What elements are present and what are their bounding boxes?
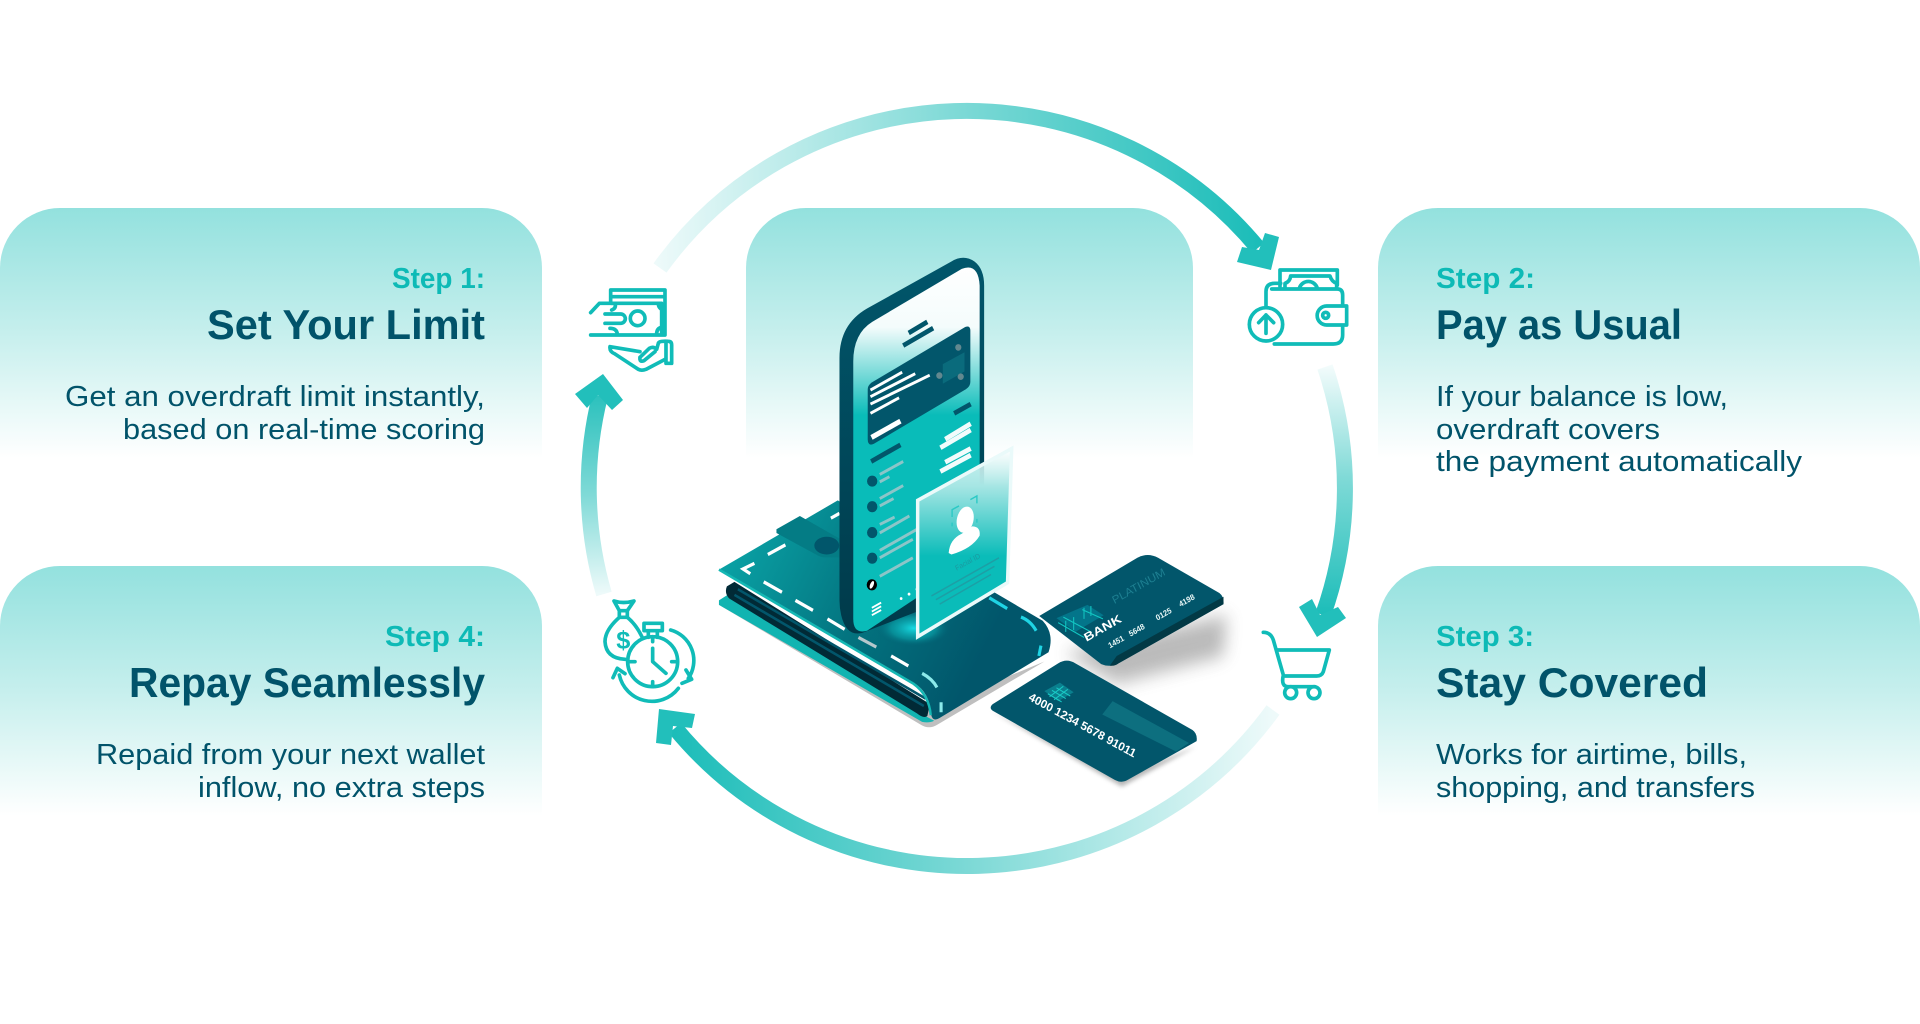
step 4 description: Repaid from your next wallet (96, 739, 485, 771)
illustration: phone, wallet and cards (719, 258, 1227, 787)
step 2 description: overdraft covers (1436, 414, 1660, 446)
arrow: step 4 to step 1 (575, 374, 623, 594)
step 2 label: Step 2: (1436, 263, 1535, 295)
step 1 description: Get an overdraft limit instantly, (65, 381, 485, 413)
arrow: step 1 to step 2 (660, 111, 1279, 270)
step 4 heading: Repay Seamlessly (129, 659, 486, 706)
icon: money bag and stopwatch (605, 601, 694, 701)
icon: shopping cart (1263, 632, 1329, 699)
panel: step 2 (1378, 208, 1920, 458)
credit card: numbered (991, 661, 1197, 787)
credit card: platinum: 4198 (1177, 592, 1197, 609)
panel: step 1 (0, 208, 542, 458)
arrow: step 2 to step 3 (1299, 367, 1346, 637)
step 2 description (1436, 381, 1803, 478)
step 1 description: based on real-time scoring (123, 414, 485, 446)
step 3 description: Works for airtime, bills, (1436, 739, 1747, 771)
panel: center backdrop (746, 208, 1193, 458)
step 2 description: the payment automatically (1436, 446, 1803, 478)
phone (839, 258, 984, 634)
glass ID card: Facial ID (954, 552, 982, 573)
panel: step 4 (0, 566, 542, 816)
glass ID card (918, 449, 1012, 637)
person icon (949, 504, 980, 554)
step 3 label: Step 3: (1436, 621, 1534, 653)
step 4 description (96, 739, 485, 804)
wallet (719, 500, 1051, 727)
credit card: platinum: 0125 (1154, 606, 1174, 623)
phone balance card (868, 326, 970, 445)
step 4 description: inflow, no extra steps (198, 772, 485, 804)
step 2 heading: Pay as Usual (1436, 301, 1682, 348)
panel: step 3 (1378, 566, 1920, 816)
step 3 heading: Stay Covered (1436, 659, 1708, 706)
credit card: platinum: 5648 (1127, 621, 1147, 639)
step 3 description (1436, 739, 1755, 804)
wallet clasp (776, 516, 841, 557)
step 4 label: Step 4: (385, 621, 485, 653)
icon: cash and hand (591, 290, 672, 370)
icon: money bag and stopwatch: $ (616, 626, 630, 654)
step 1 description (65, 381, 485, 446)
step 1 heading: Set Your Limit (207, 301, 485, 348)
icon: wallet with upload (1249, 270, 1347, 344)
credit card: platinum: 1451 (1107, 633, 1126, 650)
credit card: platinum: BANK (1082, 613, 1124, 645)
step 1 label: Step 1: (392, 263, 485, 295)
arrow: step 3 to step 4 (656, 709, 1273, 866)
step 3 description: shopping, and transfers (1436, 772, 1755, 804)
credit card: platinum: PLATINUM (1110, 566, 1167, 607)
credit card: platinum (1039, 555, 1227, 684)
credit card: numbered: 4000 1234 5678 91011 (1027, 691, 1138, 761)
step 2 description: If your balance is low, (1436, 381, 1728, 413)
